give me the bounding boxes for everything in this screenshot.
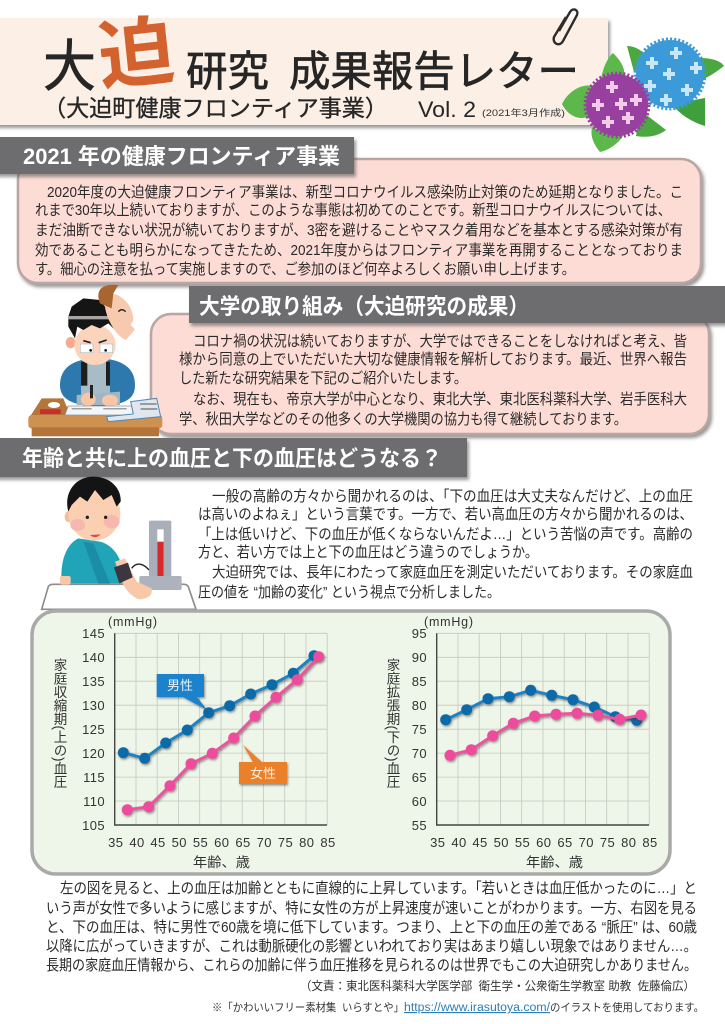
issue date: (2021年3月作成) bbox=[482, 107, 565, 118]
callout: women bbox=[239, 745, 287, 784]
x axis labels: 70 bbox=[257, 835, 272, 850]
heading bar: 2021 bbox=[0, 137, 354, 174]
y axis labels: 115 bbox=[83, 770, 105, 785]
y axis labels: 90 bbox=[412, 650, 427, 665]
x axis title: 年齢、歳 bbox=[193, 855, 251, 870]
x axis labels: 60 bbox=[214, 835, 229, 850]
illustration credit: のイラストを使用しております。 bbox=[550, 1001, 704, 1014]
volume: Vol. 2 bbox=[418, 97, 476, 122]
subtitle: （大迫町健康フロンティア事業） bbox=[43, 95, 388, 121]
callout: men: 男性 bbox=[167, 678, 193, 693]
callout: women: 女性 bbox=[250, 766, 276, 781]
y axis labels: 120 bbox=[82, 746, 105, 761]
x axis labels: 50 bbox=[494, 835, 509, 850]
x axis labels: 85 bbox=[642, 835, 658, 850]
x axis labels: 80 bbox=[621, 835, 636, 850]
heading bar: 2021: 2021 年の健康フロンティア事業 bbox=[23, 144, 340, 169]
y axis labels: 135 bbox=[82, 674, 105, 689]
author credit: （文責：東北医科薬科大学医学部 衛生学・公衆衛生学教室 助教 佐藤倫広） bbox=[300, 978, 695, 993]
y axis title: 家庭収縮期(上の)血圧 bbox=[52, 658, 67, 789]
y axis labels: 65 bbox=[412, 770, 427, 785]
y axis labels: 110 bbox=[83, 794, 105, 809]
x axis labels: 80 bbox=[299, 835, 314, 850]
men series bbox=[118, 650, 320, 764]
panel body text: 効であることも明らかになってきたため、2021年度からはフロンティア事業を再開することとなっておりま bbox=[35, 242, 683, 259]
panel body text: 様から同意の上でいただいた大切な健康情報を解析しております。最近、世界へ報告 bbox=[179, 351, 687, 368]
y axis labels: 70 bbox=[412, 746, 427, 761]
header banner bbox=[0, 8, 608, 125]
y axis labels bbox=[82, 626, 105, 833]
text block: intro to blood pressure: 大迫研究では、長年にわたって家庭血圧を測定いただいております。その家庭血 bbox=[212, 564, 693, 581]
text block: intro to blood pressure: は高いのよねぇ」という言葉です。一方で、若い高血圧の方々から聞かれるのは、 bbox=[198, 506, 693, 523]
y axis labels: 85 bbox=[412, 674, 427, 689]
men series bbox=[440, 685, 642, 726]
y axis labels: 125 bbox=[82, 722, 105, 737]
illustration credit: ※「かわいいフリー素材集 いらすとや」 bbox=[212, 1000, 404, 1014]
unit: (mmHg) bbox=[108, 615, 157, 629]
panel body text: 学、秋田大学などのその他多くの大学機関の協力も得て継続しております。 bbox=[179, 410, 627, 428]
x axis labels: 60 bbox=[536, 835, 551, 850]
illustration: researcher at desk bbox=[28, 285, 162, 436]
text block: intro to blood pressure bbox=[198, 488, 693, 601]
x axis labels: 50 bbox=[172, 835, 187, 850]
chart: diastolic pressure by age bbox=[384, 615, 658, 870]
unit: (mmHg) bbox=[424, 615, 473, 629]
heading bar: blood pressure: 年齢と共に上の血圧と下の血圧はどうなる？ bbox=[22, 446, 442, 471]
x axis labels: 75 bbox=[278, 835, 293, 850]
panel body text: した新たな研究結果を下記のご紹介いたします。 bbox=[179, 370, 467, 387]
y axis labels: 55 bbox=[412, 818, 427, 833]
x axis labels bbox=[108, 835, 336, 850]
icon: paperclip bbox=[554, 9, 577, 44]
x axis labels: 45 bbox=[150, 835, 166, 850]
heading bar: university: 大学の取り組み（大迫研究の成果） bbox=[199, 294, 529, 319]
x axis labels: 35 bbox=[430, 835, 445, 850]
x axis labels: 35 bbox=[108, 835, 123, 850]
y axis labels: 95 bbox=[412, 626, 427, 641]
x axis labels: 65 bbox=[235, 835, 251, 850]
title: 研究 bbox=[186, 48, 269, 95]
illustration credit bbox=[212, 1000, 704, 1014]
text block: intro to blood pressure: 方と、若い方では上と下の血圧はどう違うのでしょうか。 bbox=[198, 544, 538, 561]
title: 大 bbox=[43, 35, 96, 98]
x axis title: 年齢、歳 bbox=[526, 855, 584, 870]
x axis labels bbox=[430, 835, 658, 850]
x axis labels: 55 bbox=[515, 835, 530, 850]
women series bbox=[122, 651, 324, 815]
y axis labels: 130 bbox=[82, 698, 105, 713]
y axis labels: 105 bbox=[82, 818, 105, 833]
heading bar: blood pressure bbox=[0, 438, 467, 477]
text block: intro to blood pressure: 「上は低いけど、下の血圧が低くならないんだよ…」という苦悩の声です。高齢の bbox=[198, 525, 693, 543]
y axis title: 家庭拡張期(下の)血圧 bbox=[384, 658, 400, 789]
x axis labels: 70 bbox=[579, 835, 594, 850]
text block: chart explanation bbox=[46, 880, 697, 974]
panel: university efforts bbox=[151, 314, 709, 434]
x axis labels: 45 bbox=[472, 835, 488, 850]
title: 成果報告レター bbox=[289, 48, 579, 95]
title bbox=[43, 8, 579, 101]
panel body text bbox=[179, 333, 687, 428]
x axis labels: 40 bbox=[451, 835, 467, 850]
panel body text: 2020年度の大迫健康フロンティア事業は、新型コロナウイルス感染防止対策のため延期となりました。こ bbox=[47, 184, 683, 201]
panel body text: コロナ禍の状況は続いておりますが、大学ではできることをしなければと考え、皆 bbox=[193, 333, 687, 350]
x axis labels: 65 bbox=[557, 835, 573, 850]
y axis labels: 145 bbox=[82, 626, 105, 641]
text block: intro to blood pressure: 圧の値を “加齢の変化” という視点で分析しました。 bbox=[198, 584, 500, 601]
women series bbox=[444, 708, 646, 761]
text block: intro to blood pressure: 一般の高齢の方々から聞かれるのは、「下の血圧は大丈夫なんだけど、上の血圧 bbox=[212, 488, 693, 505]
y axis labels: 75 bbox=[412, 722, 427, 737]
panel: charts bbox=[32, 611, 670, 874]
panel body text: まだ油断できない状況が続いておりますが、3密を避けることやマスク着用などを基本とする感染対策が有 bbox=[35, 222, 683, 239]
x axis labels: 85 bbox=[320, 835, 336, 850]
panel body text: れまで30年以上続いておりますが、このような事態は初めてのことです。新型コロナウイルスについては、 bbox=[35, 202, 671, 219]
panel: 2021 health frontier bbox=[18, 159, 701, 283]
y axis labels: 80 bbox=[412, 698, 427, 713]
x axis labels: 75 bbox=[600, 835, 615, 850]
y axis labels: 60 bbox=[412, 794, 427, 809]
x axis labels: 40 bbox=[129, 835, 145, 850]
chart: systolic pressure by age bbox=[52, 615, 336, 870]
icon: hydrangea bbox=[562, 40, 724, 152]
title: 迫 bbox=[94, 8, 178, 101]
panel body text bbox=[35, 184, 683, 278]
illustration credit: https://www.irasutoya.com/ bbox=[404, 1002, 551, 1014]
panel body text: す。細心の注意を払って実施しますので、ご参加のほど何卒よろしくお願い申し上げます。 bbox=[35, 261, 575, 278]
y axis labels: 140 bbox=[82, 650, 105, 665]
panel body text: なお、現在も、帝京大学が中心となり、東北大学、東北医科薬科大学、岩手医科大 bbox=[193, 391, 687, 408]
heading bar: university bbox=[189, 286, 725, 323]
x axis labels: 55 bbox=[193, 835, 208, 850]
illustration: man measuring blood pressure bbox=[42, 477, 196, 609]
callout: men bbox=[157, 674, 207, 710]
y axis labels bbox=[412, 626, 427, 833]
